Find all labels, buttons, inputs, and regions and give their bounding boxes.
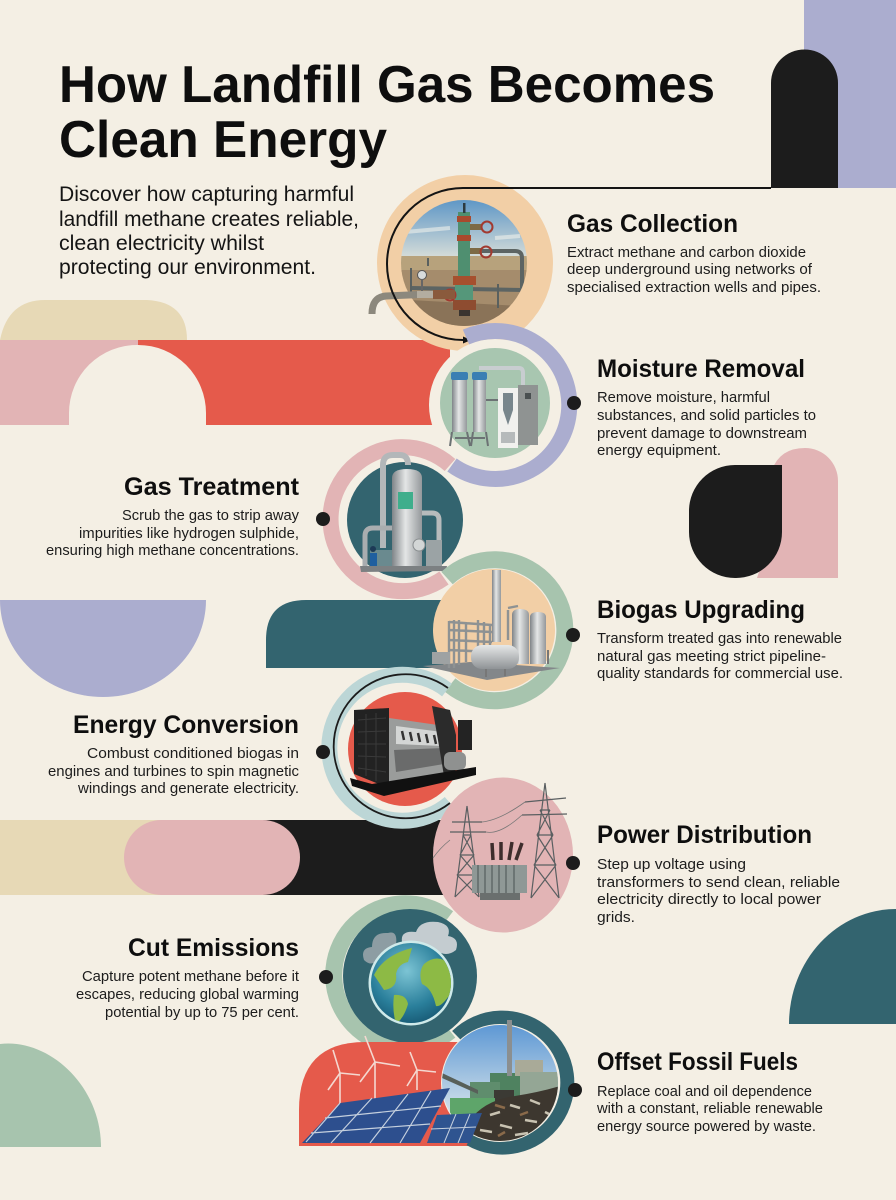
step 4 image: biogas upgrading (423, 560, 565, 701)
decor: red arch with wind turbines (299, 1036, 470, 1146)
step 4 text: Biogas Upgrading (597, 596, 805, 624)
step 5 text: Combust conditioned biogas in (87, 745, 299, 762)
step 2 text: Moisture Removal (597, 355, 805, 383)
step 4 text: natural gas meeting strict pipeline- (597, 648, 826, 665)
step 7 text: escapes, reducing global warming (76, 986, 299, 1003)
step 7 text: Capture potent methane before it (82, 968, 300, 985)
step 8 solar panels (302, 1088, 482, 1143)
step 8 text: with a constant, reliable renewable (596, 1100, 823, 1117)
step 8 text (596, 1048, 823, 1135)
step 3 text: Scrub the gas to strip away (122, 507, 299, 524)
step 6 image: power distribution (433, 778, 573, 932)
step 7 marker (319, 970, 333, 984)
intro paragraph (59, 183, 359, 279)
step 3 text: impurities like hydrogen sulphide, (79, 525, 299, 542)
step 1 text: specialised extraction wells and pipes. (567, 279, 821, 296)
decor: wheat, pink and black band (0, 820, 450, 895)
step 4 marker (566, 628, 580, 642)
step 6 text: Power Distribution (597, 821, 812, 849)
intro paragraph: protecting our environment. (59, 256, 316, 279)
decor: pink and red band with arch (0, 340, 450, 425)
step 8 text: Replace coal and oil dependence (597, 1083, 812, 1100)
step 8 text: Offset Fossil Fuels (597, 1048, 798, 1076)
connector: curved arrow into moisture removal (387, 188, 771, 344)
step 8 marker (568, 1083, 582, 1097)
step 4 text: Transform treated gas into renewable (597, 630, 842, 647)
decor: teal bar (266, 600, 450, 668)
decor: black and pink shapes right (689, 448, 838, 578)
step 1 text: Extract methane and carbon dioxide (567, 244, 806, 261)
step 6 text: transformers to send clean, reliable (597, 874, 840, 891)
step 7 text: Cut Emissions (128, 934, 299, 962)
step 2 text: prevent damage to downstream (597, 425, 807, 442)
step 5 text: engines and turbines to spin magnetic (48, 763, 299, 780)
step 3 ring: gas treatment (331, 447, 450, 591)
step 3 text: Gas Treatment (124, 473, 300, 501)
step 5 text (48, 711, 299, 797)
step 1 text (567, 210, 821, 296)
step 2 text: energy equipment. (597, 442, 721, 459)
decor: wheat rounded bar (0, 300, 187, 340)
step 3 marker (316, 512, 330, 526)
step 1 text: Gas Collection (567, 210, 738, 238)
intro paragraph: clean electricity whilst (59, 232, 264, 255)
step 8 image: offset fossil fuels (440, 1018, 567, 1148)
intro paragraph: Discover how capturing harmful (59, 183, 354, 206)
step 1 text: deep underground using networks of (567, 261, 813, 278)
step 7 image: cut emissions (334, 904, 477, 1047)
title: Clean Energy (59, 110, 387, 168)
step 2 text: Remove moisture, harmful (597, 389, 770, 406)
title (59, 55, 715, 168)
step 2 image: moisture removal (429, 331, 569, 479)
step 6 text: Step up voltage using (597, 856, 746, 873)
step 7 text: potential by up to 75 per cent. (105, 1004, 299, 1021)
step 3 text: ensuring high methane concentrations. (46, 542, 299, 559)
decor: black arch top right (771, 49, 838, 188)
step 6 marker (566, 856, 580, 870)
step 2 marker (567, 396, 581, 410)
step 5 image: energy conversion (329, 674, 476, 821)
decor: sage arch bottom left (0, 1043, 101, 1147)
step 6 text: grids. (597, 909, 635, 926)
step 6 text: electricity directly to local power (597, 891, 821, 908)
step 3 image: gas treatment (347, 455, 463, 578)
step 3 text (46, 473, 300, 559)
decor: lavender block top right (804, 0, 896, 188)
step 5 marker (316, 745, 330, 759)
step 4 text (597, 596, 843, 682)
step 5 text: Energy Conversion (73, 711, 299, 739)
decor: lavender half disc (0, 600, 206, 697)
step 1 image: gas collection (372, 175, 553, 351)
step 2 text: substances, and solid particles to (597, 407, 816, 424)
title: How Landfill Gas Becomes (59, 55, 715, 113)
intro paragraph: landfill methane creates reliable, (59, 208, 359, 231)
step 4 text: quality standards for commercial use. (597, 665, 843, 682)
step 2 text (597, 355, 816, 459)
step 6 text (597, 821, 840, 926)
step 8 text: energy source powered by waste. (597, 1118, 816, 1135)
step 5 text: windings and generate electricity. (77, 780, 299, 797)
step 7 text (76, 934, 300, 1021)
decor: teal quarter right (789, 909, 896, 1024)
